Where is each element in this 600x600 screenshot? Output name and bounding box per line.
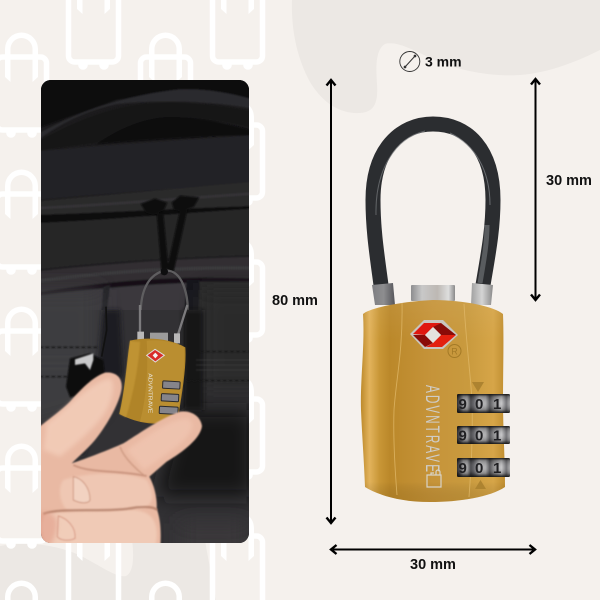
cable shackle — [373, 124, 493, 285]
combination dials: 1 — [493, 460, 501, 477]
small lock dials — [159, 381, 180, 414]
hand — [41, 372, 203, 543]
combination dials: 1 — [493, 396, 501, 413]
arrow: overall height — [326, 80, 336, 523]
side zipper pull — [66, 353, 105, 397]
label: 30 mm shackle: 30 mm — [546, 173, 592, 189]
diameter callout: 3 mm — [400, 52, 462, 72]
lower bag area, hand and lock: ADVNTRAVE — [147, 373, 153, 414]
small shackle upper part — [140, 270, 189, 310]
arrow: body width — [331, 545, 535, 554]
combination dials: 1 — [493, 428, 501, 444]
registered mark — [448, 344, 461, 358]
small lock logo — [147, 349, 164, 362]
arrow: shackle height — [531, 79, 540, 300]
small lock shackle — [140, 305, 187, 337]
combination dials — [457, 394, 510, 477]
combination dials: 9 — [458, 428, 467, 444]
zipper stitching — [33, 347, 257, 381]
small lock body — [119, 339, 186, 424]
luggage icon pattern — [0, 0, 262, 600]
zipper pulls — [141, 196, 199, 275]
background blob: bottom left — [0, 540, 216, 600]
photo: padlock on backpack zipper held by hand — [41, 80, 249, 543]
TSA diamond logo — [410, 320, 458, 349]
brand name: ADVNTRAVE — [421, 385, 442, 474]
combination dials: 9 — [458, 396, 467, 413]
icon: brand bag — [427, 470, 441, 487]
product: gold padlock — [361, 124, 510, 502]
dial pointer triangles — [472, 382, 484, 392]
label: 80 mm: 80 mm — [272, 293, 318, 309]
backpack upper pockets — [41, 80, 249, 310]
lower bag area, hand and lock — [41, 285, 249, 543]
label: 30 mm width: 30 mm — [410, 557, 456, 573]
lock body — [361, 300, 505, 502]
registered mark: R — [451, 346, 458, 356]
combination dials: 9 — [458, 460, 467, 477]
background blob: top right — [292, 0, 600, 113]
combination dials: 0 — [475, 396, 483, 413]
combination dials: 0 — [475, 460, 483, 477]
diameter callout: 3 mm: 3 mm — [425, 54, 462, 70]
icon: cable diameter circle — [400, 52, 420, 72]
combination dials: 0 — [475, 428, 483, 444]
collars and centre pin — [372, 283, 395, 305]
